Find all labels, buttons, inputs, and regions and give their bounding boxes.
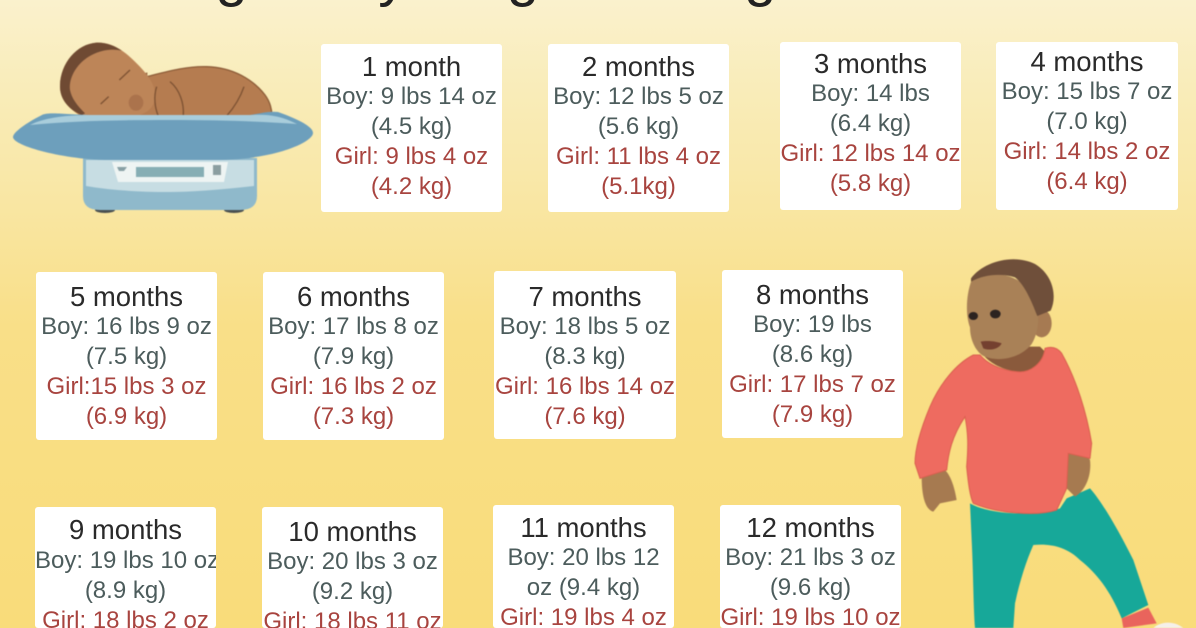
card: 1 month: 1 month xyxy=(362,51,461,82)
card: 10 months: (9.2 kg) xyxy=(312,578,393,605)
card: 8 months: 8 months xyxy=(756,279,869,310)
hand: left xyxy=(1066,452,1090,497)
card: 6 months: Boy: 17 lbs 8 oz xyxy=(268,313,439,340)
card: 2 months: Girl: 11 lbs 4 oz xyxy=(556,143,721,170)
card: 12 months xyxy=(720,505,901,628)
baby body xyxy=(83,67,272,117)
neck xyxy=(983,347,1047,372)
left leg sock and shoe xyxy=(1122,608,1183,628)
card: 7 months: (8.3 kg) xyxy=(544,343,626,370)
card: 8 months: Boy: 19 lbs xyxy=(753,311,872,338)
card: 9 months xyxy=(35,507,216,628)
card: 10 months xyxy=(262,507,443,628)
card: 11 months: Boy: 20 lbs 12 xyxy=(507,544,660,571)
card: 9 months: (8.9 kg) xyxy=(85,577,166,604)
baby hair xyxy=(60,43,122,115)
card: 12 months: Boy: 21 lbs 3 oz xyxy=(725,544,896,571)
card: 2 months: Boy: 12 lbs 5 oz xyxy=(553,83,724,110)
sweater xyxy=(915,347,1092,513)
pants xyxy=(970,488,1148,628)
illustration: baby on scale xyxy=(12,42,314,214)
baby head xyxy=(60,43,155,117)
card: 6 months: Girl: 16 lbs 2 oz xyxy=(270,373,437,400)
card: 3 months: (6.4 kg) xyxy=(830,110,911,137)
card: 5 months: 5 months xyxy=(70,281,183,312)
card: 4 months: Girl: 14 lbs 2 oz xyxy=(1004,138,1170,165)
card: 11 months: oz (9.4 kg) xyxy=(527,574,640,601)
title xyxy=(65,0,809,8)
card: 4 months: (7.0 kg) xyxy=(1046,108,1128,135)
baby xyxy=(60,43,272,117)
card: 7 months: Girl: 16 lbs 14 oz xyxy=(495,373,675,400)
card: 1 month xyxy=(321,44,502,212)
card: 9 months: Boy: 19 lbs 10 oz xyxy=(35,547,216,574)
card: 4 months xyxy=(996,42,1178,210)
card: 3 months: 3 months xyxy=(814,48,927,79)
card: 10 months: Boy: 20 lbs 3 oz xyxy=(267,548,438,575)
card: 8 months xyxy=(722,270,903,438)
card: 8 months: (8.6 kg) xyxy=(772,341,853,368)
card: 2 months: (5.6 kg) xyxy=(598,113,679,140)
card: 2 months xyxy=(548,44,729,212)
card: 5 months: Boy: 16 lbs 9 oz xyxy=(41,313,212,340)
card: 3 months: (5.8 kg) xyxy=(830,170,911,197)
card: 10 months: 10 months xyxy=(288,516,417,547)
card: 8 months: (7.9 kg) xyxy=(772,401,853,428)
card: 5 months xyxy=(36,272,217,440)
card: 5 months: Girl:15 lbs 3 oz xyxy=(46,373,207,400)
head xyxy=(967,259,1054,359)
card: 3 months xyxy=(780,42,961,210)
card: 1 month: Boy: 9 lbs 14 oz xyxy=(326,83,497,110)
card: 11 months xyxy=(493,505,674,628)
scale base xyxy=(83,158,257,213)
scale platter xyxy=(13,112,313,160)
card: 9 months: 9 months xyxy=(69,514,182,545)
card: 3 months: Boy: 14 lbs xyxy=(811,80,930,107)
card: 1 month: Girl: 9 lbs 4 oz xyxy=(335,143,488,170)
card: 1 month: (4.2 kg) xyxy=(371,173,452,200)
baby face xyxy=(101,70,244,116)
card: 3 months: Girl: 12 lbs 14 oz xyxy=(780,140,961,167)
card: 4 months: 4 months xyxy=(1030,46,1144,77)
card: 4 months: Boy: 15 lbs 7 oz xyxy=(1002,78,1172,105)
card: 7 months: (7.6 kg) xyxy=(544,403,626,430)
card: 6 months: 6 months xyxy=(297,281,410,312)
card: 6 months: (7.3 kg) xyxy=(313,403,394,430)
card: 5 months: (7.5 kg) xyxy=(86,343,167,370)
card: 2 months: (5.1kg) xyxy=(601,173,676,200)
card: 4 months: (6.4 kg) xyxy=(1046,168,1128,195)
card: 2 months: 2 months xyxy=(582,51,695,82)
card: 11 months: 11 months xyxy=(520,512,647,543)
card: 7 months: 7 months xyxy=(528,281,642,312)
card: 8 months: Girl: 17 lbs 7 oz xyxy=(729,371,896,398)
card: 7 months xyxy=(494,271,676,439)
card: 6 months xyxy=(263,272,444,440)
card: 5 months: (6.9 kg) xyxy=(86,403,167,430)
card: 12 months: (9.6 kg) xyxy=(770,574,851,601)
card: 12 months: 12 months xyxy=(746,512,875,543)
card: 7 months: Boy: 18 lbs 5 oz xyxy=(500,313,670,340)
card: 6 months: (7.9 kg) xyxy=(313,343,394,370)
hand: right xyxy=(922,470,957,512)
card: 1 month: (4.5 kg) xyxy=(371,113,452,140)
